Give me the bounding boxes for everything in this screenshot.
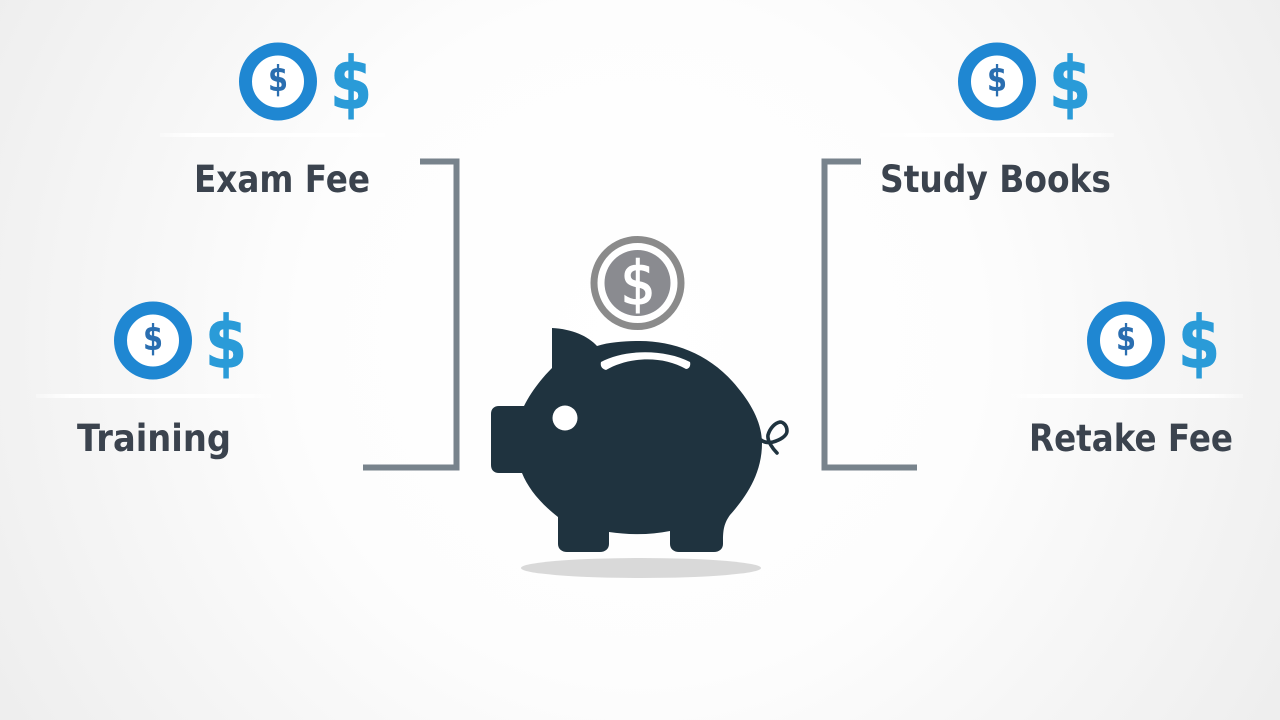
panel: training [36, 300, 271, 460]
icon: exam fee coin: $ [268, 58, 288, 100]
icon: training coin: $ [143, 317, 163, 359]
icon: exam fee coin [246, 49, 310, 114]
right bracket [824, 162, 917, 468]
icon: falling coin [594, 240, 681, 326]
icon: study books coin: $ [987, 58, 1007, 100]
panel: study books [880, 41, 1114, 201]
pig body [491, 328, 762, 552]
icon: study books dollar sign: $ [1049, 41, 1091, 126]
icon: training coin [120, 308, 186, 373]
panel: retake fee [1011, 300, 1243, 460]
icon: training dollar sign: $ [205, 300, 247, 385]
icon: retake fee coin: $ [1116, 317, 1136, 359]
illustration: piggy bank [491, 240, 787, 578]
label: training: Training [77, 417, 231, 460]
coin slot highlight [601, 352, 690, 370]
label: exam fee: Exam Fee [194, 158, 370, 201]
icon: exam fee dollar sign: $ [330, 41, 372, 126]
pig tail [761, 422, 787, 453]
icon: study books coin [964, 49, 1030, 114]
label: retake fee: Retake Fee [1029, 417, 1233, 460]
panel: exam fee [160, 41, 385, 201]
label: study books: Study Books [880, 158, 1111, 201]
pig eye [552, 406, 578, 430]
icon: retake fee coin [1094, 308, 1158, 373]
icon: retake fee dollar sign: $ [1178, 300, 1220, 385]
icon: falling coin: $ [620, 248, 656, 319]
shadow [521, 558, 761, 578]
left bracket [363, 162, 456, 468]
